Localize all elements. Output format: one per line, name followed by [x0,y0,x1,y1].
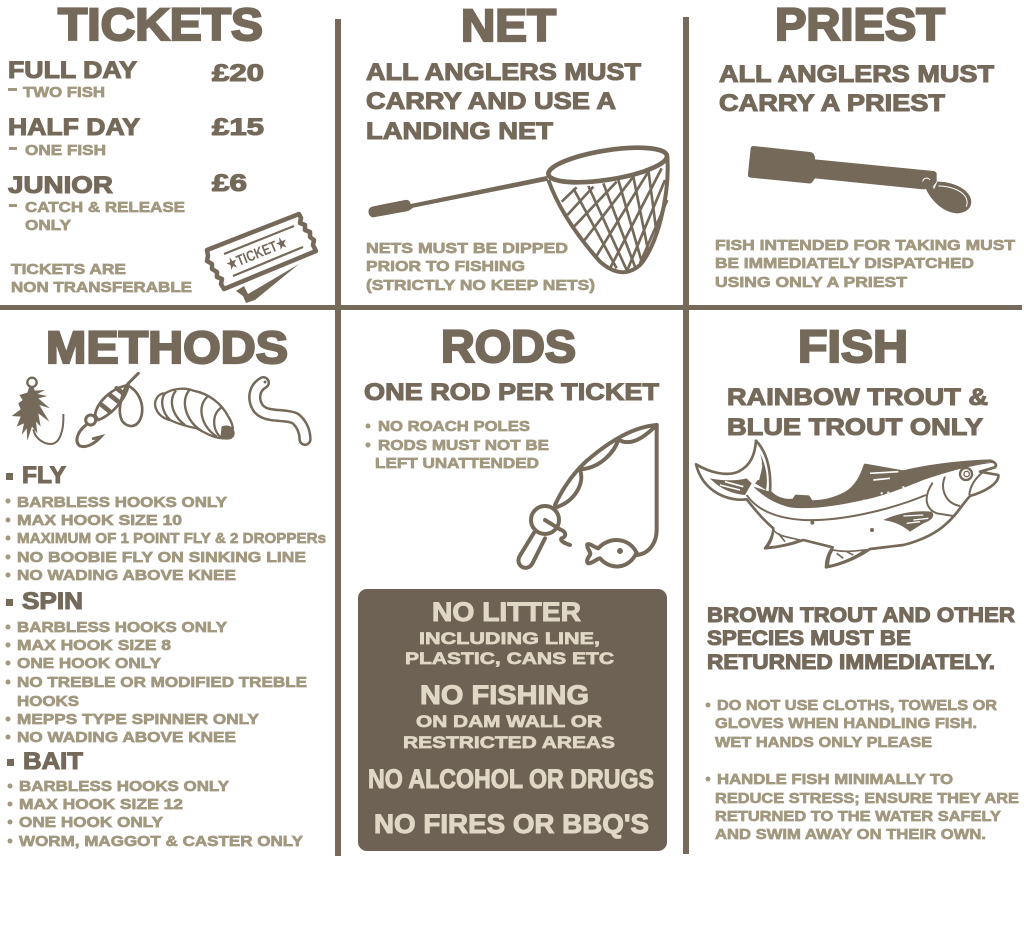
prohibition: no alcohol or drugs: NO ALCOHOL OR DRUGS [368,764,654,794]
method: spin [6,588,307,746]
list: rod rules: LEFT UNATTENDED [375,455,539,472]
method: fly: BARBLESS HOOKS ONLY [17,494,227,511]
text: priest rule: ALL ANGLERS MUST [719,61,994,88]
method: fly: NO WADING ABOVE KNEE [17,567,236,584]
note: dipping nets: NETS MUST BE DIPPED [366,240,568,257]
method: fly: MAXIMUM OF 1 POINT FLY & 2 DROPPERs [17,530,326,547]
panel: net [366,0,669,294]
icon: fishing rod [518,425,657,568]
ticket type: half day: HALF DAY [8,114,140,141]
heading: tickets: TICKETS [58,0,263,50]
prohibition: no fires or bbqs: NO FIRES OR BBQ'S [374,809,649,839]
prohibition: no fishing: RESTRICTED AREAS [403,733,615,752]
note: handling with wet hands: GLOVES WHEN HANDLING FISH. [715,715,977,732]
ticket type: full day: £20 [212,60,264,87]
note: minimal handling [706,771,1019,843]
ticket type: full day [8,57,264,101]
panel: rods [358,321,667,851]
note: handling with wet hands [706,697,997,751]
note: non transferable [11,261,192,296]
prohibition: no litter [405,597,614,668]
prohibition: no litter: NO LITTER [432,597,581,627]
text: other species [707,604,1015,674]
list: rod rules [366,418,549,472]
note: minimal handling: RETURNED TO THE WATER SAFELY [715,808,1001,825]
ticket type: full day: TWO FISH [23,84,105,101]
heading: fish: FISH [798,321,908,372]
text: permitted species: RAINBOW TROUT & [727,384,988,411]
ticket type: junior: CATCH & RELEASE [25,199,185,216]
text: net rule [366,59,641,145]
text: other species: BROWN TROUT AND OTHER [707,604,1015,627]
panel: priest [715,0,1015,291]
ticket type: full day: FULL DAY [8,57,137,84]
prohibition: no fishing: ON DAM WALL OR [416,712,602,731]
list: rod rules: NO ROACH POLES [378,418,530,435]
note: dipping nets [366,240,595,294]
ticket type: half day [8,114,264,159]
ticket type: junior: ONLY [25,217,71,234]
note: dipping nets: PRIOR TO FISHING [366,258,525,275]
heading: priest: PRIEST [775,0,945,50]
note: handling with wet hands: WET HANDS ONLY PLEASE [715,734,932,751]
text: other species: RETURNED IMMEDIATELY. [707,651,995,674]
note: minimal handling: AND SWIM AWAY ON THEIR OWN. [715,826,986,843]
icon: maggot [155,389,233,438]
panel: methods [6,322,326,850]
ticket type: half day: £15 [212,114,264,141]
method: bait: WORM, MAGGOT & CASTER ONLY [19,833,303,850]
method: fly [6,462,326,584]
ticket type: half day: ONE FISH [25,142,106,159]
note: dipping nets: (STRICTLY NO KEEP NETS) [366,277,595,294]
text: net rule: LANDING NET [366,118,553,145]
method: spin: MAX HOOK SIZE 8 [17,637,171,654]
method: spin: BARBLESS HOOKS ONLY [17,619,227,636]
note: dispatching fish: USING ONLY A PRIEST [715,274,907,291]
note: dispatching fish: FISH INTENDED FOR TAKING MUST [715,237,1015,254]
method: bait: BAIT [23,748,83,775]
icon: fly [12,378,63,444]
prohibition: no fishing: NO FISHING [420,680,589,710]
icon: priest [748,146,971,213]
method: bait: MAX HOOK SIZE 12 [19,796,183,813]
text: permitted species [727,384,988,441]
note: non transferable: NON TRANSFERABLE [11,279,192,296]
icon: trout [696,441,998,567]
note: dispatching fish [715,237,1015,291]
panel: fish [696,321,1019,843]
ticket type: junior: £6 [212,170,247,197]
panel: tickets [8,0,316,303]
icon: ticket [207,214,316,303]
text: priest rule: CARRY A PRIEST [719,90,945,117]
heading: net: NET [461,0,556,51]
method: fly: MAX HOOK SIZE 10 [17,512,182,529]
text: other species: SPECIES MUST BE [707,627,911,650]
method: fly: NO BOOBIE FLY ON SINKING LINE [17,549,306,566]
method: bait: BARBLESS HOOKS ONLY [19,778,229,795]
prohibition: no fishing [403,680,615,752]
ticket type: junior [8,170,247,234]
icon: spinner [77,373,142,447]
panel: prohibitions [358,589,667,851]
note: dispatching fish: BE IMMEDIATELY DISPATCHED [715,255,974,272]
method: fly: FLY [22,462,66,489]
heading: rods: RODS [441,321,576,372]
text: net rule: ALL ANGLERS MUST [366,59,641,86]
icon: ticket: ★TICKET★ [224,234,290,274]
note: non transferable: TICKETS ARE [11,261,126,278]
method: spin: MEPPS TYPE SPINNER ONLY [17,711,259,728]
prohibition: no litter: PLASTIC, CANS ETC [405,649,614,668]
list: rod rules: RODS MUST NOT BE [378,437,549,454]
method: spin: HOOKS [17,693,79,710]
heading: methods: METHODS [46,322,288,373]
method: spin: SPIN [22,588,83,615]
method: spin: ONE HOOK ONLY [17,655,161,672]
text: permitted species: BLUE TROUT ONLY [727,414,983,441]
method: spin: NO TREBLE OR MODIFIED TREBLE [17,674,307,691]
note: minimal handling: HANDLE FISH MINIMALLY TO [717,771,953,788]
note: minimal handling: REDUCE STRESS; ENSURE THEY ARE [715,790,1019,807]
note: handling with wet hands: DO NOT USE CLOTHS, TOWELS OR [717,697,997,714]
prohibition: no litter: INCLUDING LINE, [419,629,600,648]
icon: worm [255,381,305,439]
method: bait [7,748,303,850]
method: spin: NO WADING ABOVE KNEE [17,729,236,746]
text: one rod per ticket: ONE ROD PER TICKET [364,379,659,406]
method: bait: ONE HOOK ONLY [19,814,163,831]
icon: landing net [369,141,669,272]
ticket type: junior: JUNIOR [8,172,113,199]
text: priest rule [719,61,994,117]
text: net rule: CARRY AND USE A [366,88,616,115]
